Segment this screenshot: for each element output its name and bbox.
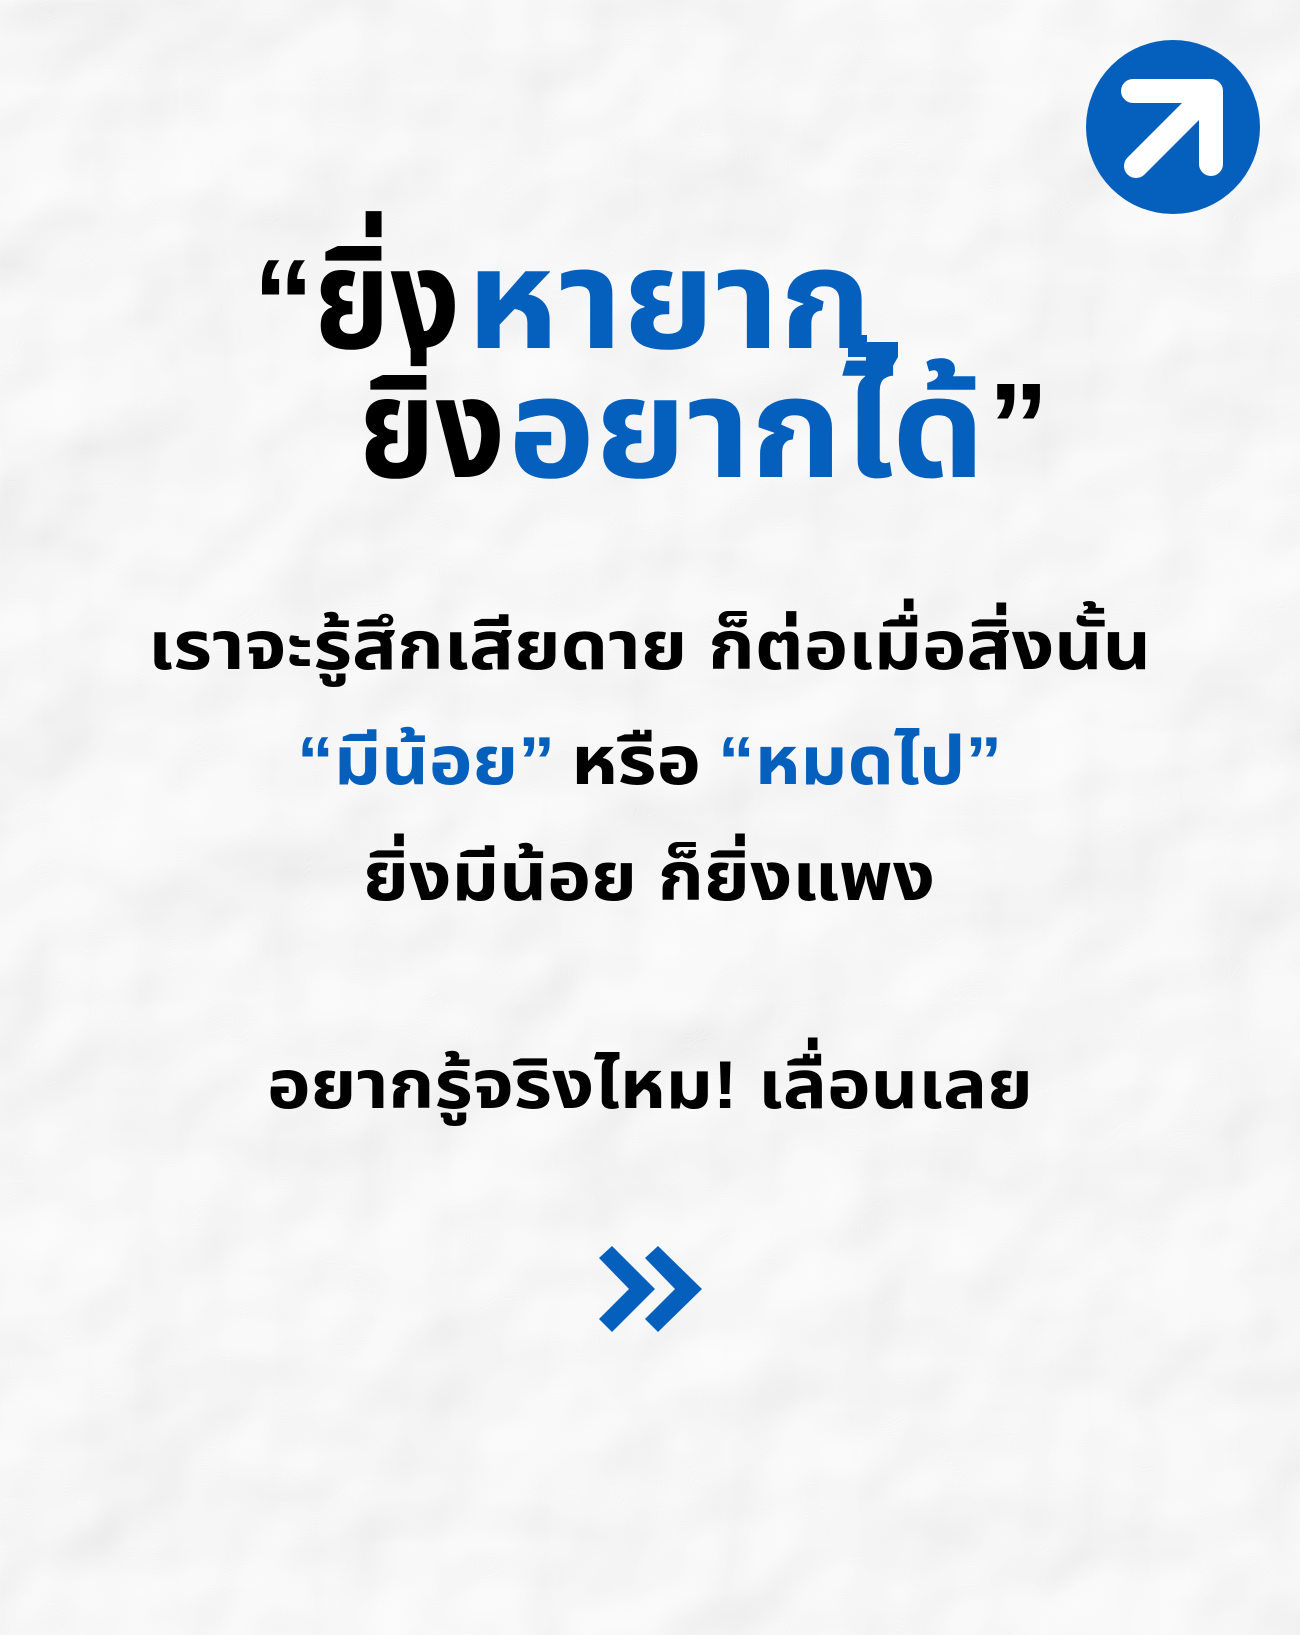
body text: line 2 with blue highlights: หรือ bbox=[571, 723, 701, 799]
title: two-line quote: ยิ่ง bbox=[359, 339, 505, 507]
title: two-line quote: ” bbox=[988, 358, 1049, 494]
title: two-line quote: ยิ่ง bbox=[314, 210, 460, 378]
body text: line 2 with blue highlights: “หมดไป” bbox=[718, 723, 1002, 799]
call to action text: อยากรู้จริงไหม! เลื่อนเลย bbox=[267, 1037, 1033, 1126]
body text: line 1: เราจะรู้สึกเสียดาย ก็ต่อเมื่อสิ่งนั้น bbox=[148, 598, 1151, 687]
body text: line 2 with blue highlights bbox=[297, 723, 1002, 799]
title: two-line quote: “ bbox=[253, 234, 314, 370]
title: two-line quote bbox=[253, 210, 1049, 507]
icon: double chevron arrow bbox=[599, 1246, 702, 1332]
title: two-line quote: อยากได้ bbox=[508, 350, 985, 507]
title: two-line quote: หายาก bbox=[466, 221, 872, 378]
body text: line 3: ยิ่งมีน้อย ก็ยิ่งแพง bbox=[363, 833, 935, 915]
body text: line 2 with blue highlights: “มีน้อย” bbox=[297, 723, 555, 799]
logo: blue circle with arrow bbox=[1086, 40, 1260, 214]
